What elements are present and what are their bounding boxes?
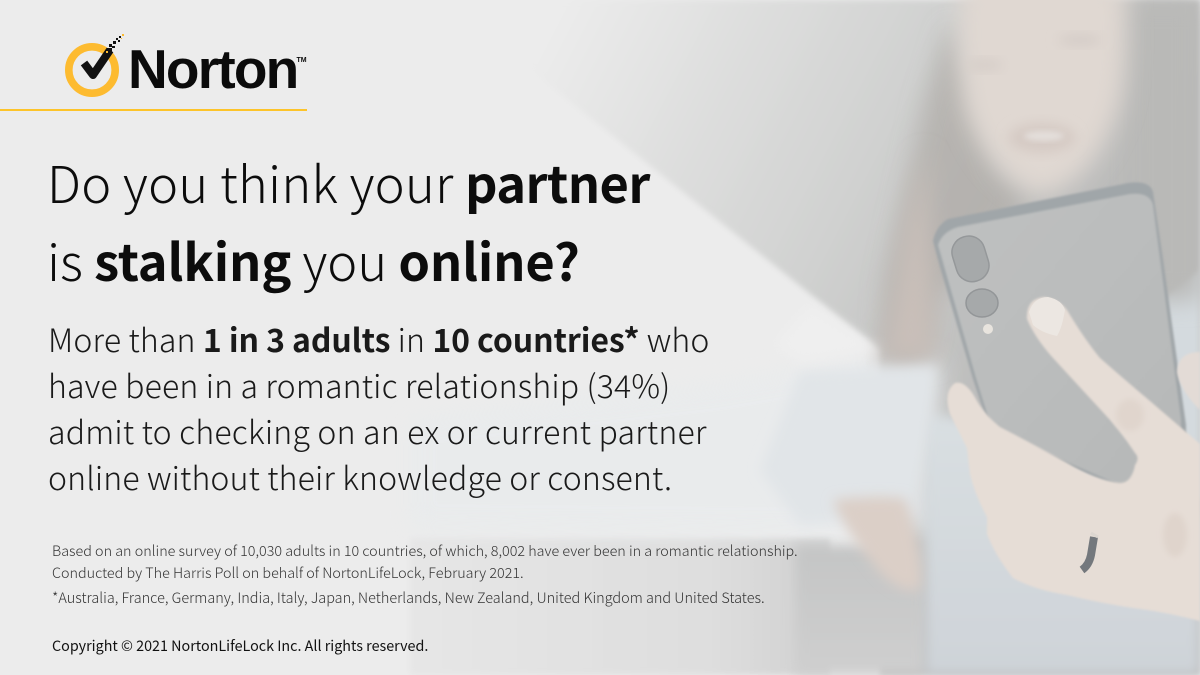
ring on finger — [1082, 533, 1098, 570]
title: Do you think your partner — [47, 144, 650, 218]
lower band — [410, 538, 830, 675]
country footnote: *Australia, France, Germany, India, Italy, Japan, Netherlands, New Zealand, United Kingdom and United States. — [52, 587, 765, 608]
icon: yellow ring with check mark — [65, 34, 124, 97]
title — [47, 144, 650, 296]
body text: have been in a romantic relationship (34%) — [48, 362, 670, 408]
torso — [925, 415, 1200, 675]
upper right wash — [440, 0, 1200, 675]
body text: More than 1 in 3 adults in 10 countries* who — [48, 316, 710, 362]
body text: admit to checking on an ex or current partner — [48, 408, 707, 454]
body text — [48, 316, 710, 500]
survey note: Conducted by The Harris Poll on behalf of NortonLifeLock, February 2021. — [52, 562, 524, 583]
wordmark: NortonTM — [128, 38, 307, 100]
logo underline — [0, 108, 307, 110]
face — [959, 0, 1126, 195]
body text: online without their knowledge or consent. — [48, 454, 672, 500]
hair — [880, 20, 1030, 365]
cup — [760, 366, 937, 525]
logo: Norton — [65, 34, 307, 100]
title: is stalking you online? — [47, 222, 580, 296]
phone — [933, 182, 1186, 490]
copyright: Copyright © 2021 NortonLifeLock Inc. All rights reserved. — [52, 635, 428, 656]
survey note: Based on an online survey of 10,030 adults in 10 countries, of which, 8,002 have ever been in a romantic relationship. — [52, 540, 798, 561]
hand — [947, 297, 1200, 621]
survey note — [52, 540, 798, 583]
